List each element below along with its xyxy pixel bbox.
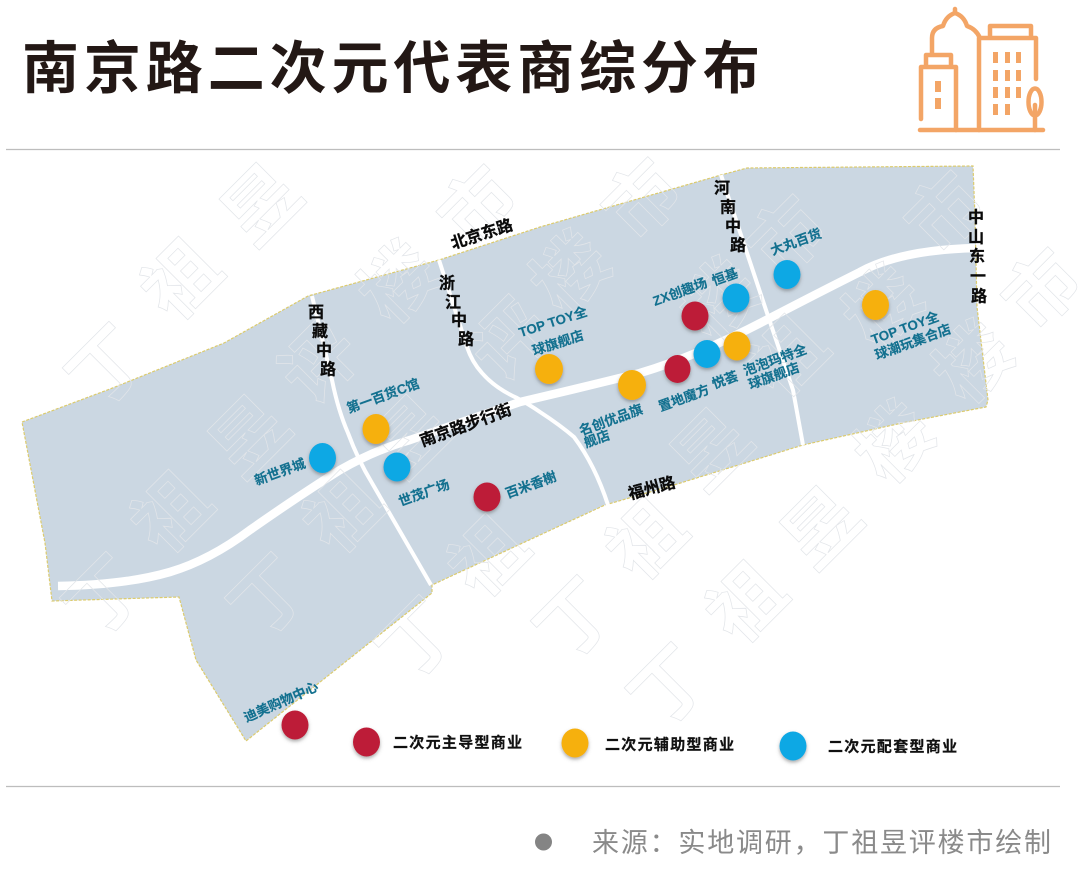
watermark: repeated outlined text bbox=[49, 144, 1080, 743]
legend: dominant: 二次元主导型商业 bbox=[393, 734, 523, 752]
label: TOP TOY全球旗舰店: TOP TOY全 bbox=[517, 303, 590, 340]
road label: 浙江中路: 路 bbox=[458, 330, 474, 348]
legend: supporting bbox=[780, 732, 958, 760]
watermark: repeated outlined text: 楼 bbox=[828, 251, 940, 363]
watermark: repeated outlined text: 祖 bbox=[116, 457, 228, 569]
road label: 中山东一路: 东 bbox=[969, 246, 985, 266]
label: TOP TOY全球潮玩集合店: 球潮玩集合店 bbox=[873, 320, 953, 363]
watermark: repeated outlined text: 昱 bbox=[356, 381, 468, 493]
road label: 中山东一路: 中 bbox=[968, 208, 984, 226]
markers: auxiliary type bbox=[362, 290, 889, 444]
road label: 河南中路: 中 bbox=[725, 218, 741, 236]
watermark: repeated outlined text: 评 bbox=[264, 307, 376, 419]
label: 泡泡玛特全球旗舰店: 泡泡玛特全 bbox=[741, 340, 809, 378]
label: 泡泡玛特全球旗舰店: 球旗舰店 bbox=[746, 359, 802, 392]
watermark: repeated outlined text: 昱 bbox=[206, 149, 318, 261]
legend: dominant bbox=[353, 728, 523, 756]
road label: 西藏中路: 中 bbox=[316, 342, 332, 360]
watermark: repeated outlined text: 丁 bbox=[214, 541, 326, 653]
road label: 北京东路: 北京东路 bbox=[448, 215, 515, 253]
road label: 西藏中路: 路 bbox=[320, 360, 336, 378]
legend: auxiliary: 二次元辅助型商业 bbox=[605, 736, 735, 754]
label: ZX创趣场: ZX创趣场 bbox=[650, 274, 709, 309]
watermark: repeated outlined text: 楼 bbox=[839, 387, 951, 499]
watermark: repeated outlined text: 丁 bbox=[49, 541, 161, 653]
legend: auxiliary bbox=[562, 728, 735, 758]
title: 南京路二次元代表商综分布 bbox=[22, 37, 765, 101]
watermark: repeated outlined text: 祖 bbox=[732, 301, 844, 413]
label: 百米香榭: 百米香榭 bbox=[503, 468, 559, 501]
watermark: repeated outlined text: 昱 bbox=[656, 394, 768, 506]
road label: 河南中路: 南 bbox=[720, 198, 736, 216]
watermark: repeated outlined text: 楼 bbox=[343, 227, 455, 339]
watermark: repeated outlined text: 市 bbox=[587, 144, 699, 256]
watermark: repeated outlined text: 祖 bbox=[691, 547, 803, 659]
watermark: repeated outlined text: 祖 bbox=[591, 484, 703, 596]
watermark: repeated outlined text: 丁 bbox=[520, 564, 632, 676]
label: 第一百货C馆: 第一百货C馆 bbox=[344, 375, 421, 416]
watermark: repeated outlined text: 楼 bbox=[664, 244, 776, 356]
watermark: repeated outlined text: 丁 bbox=[52, 311, 164, 423]
watermark: repeated outlined text: 祖 bbox=[126, 224, 238, 336]
watermark: repeated outlined text: 评 bbox=[454, 284, 566, 396]
watermark: repeated outlined text: 丁 bbox=[614, 631, 726, 743]
road label: 中山东一路 bbox=[968, 208, 987, 306]
label: 悦荟: 悦荟 bbox=[710, 367, 740, 392]
label: 名创优品旗舰店: 名创优品旗 bbox=[577, 401, 645, 438]
watermark: repeated outlined text: 市 bbox=[890, 157, 1002, 269]
road label: 西藏中路: 藏 bbox=[312, 322, 328, 340]
label: 新世界城: 新世界城 bbox=[252, 455, 308, 488]
icon: city buildings bbox=[920, 9, 1043, 130]
road label: 福州路: 福州路 bbox=[626, 473, 677, 503]
road label: 西藏中路: 西 bbox=[308, 304, 324, 322]
label: 恒基: 恒基 bbox=[710, 264, 740, 289]
watermark: repeated outlined text: 楼 bbox=[515, 217, 627, 329]
label: TOP TOY全球潮玩集合店: TOP TOY全 bbox=[869, 308, 942, 347]
label: 迪美购物中心: 迪美购物中心 bbox=[241, 678, 320, 725]
source note: 来源：实地调研，丁祖昱评楼市绘制 bbox=[592, 828, 1053, 858]
road label: 浙江中路: 浙 bbox=[439, 274, 455, 292]
watermark: repeated outlined text: 昱 bbox=[194, 381, 306, 493]
markers: dominant type bbox=[282, 302, 708, 740]
watermark: repeated outlined text: 楼 bbox=[918, 307, 1030, 419]
road label: 河南中路: 路 bbox=[730, 236, 746, 254]
road label: 河南中路: 河 bbox=[714, 180, 730, 198]
watermark: repeated outlined text: 市 bbox=[732, 181, 844, 293]
road label: 中山东一路: 山 bbox=[968, 228, 984, 246]
source bullet bbox=[535, 834, 552, 850]
watermark: repeated outlined text: 昱 bbox=[766, 472, 878, 584]
label: 大丸百货: 大丸百货 bbox=[768, 225, 824, 258]
road label: 河南中路 bbox=[714, 180, 746, 254]
label: 世茂广场: 世茂广场 bbox=[396, 476, 452, 509]
road label: 中山东一路: 路 bbox=[971, 286, 987, 306]
label: TOP TOY全球旗舰店 bbox=[517, 303, 590, 358]
watermark: repeated outlined text: 市 bbox=[423, 151, 535, 263]
watermark: repeated outlined text: 祖 bbox=[288, 457, 400, 569]
roads bbox=[58, 175, 975, 586]
watermark: repeated outlined text: 祖 bbox=[433, 501, 545, 613]
markers: supporting type bbox=[309, 260, 800, 482]
label: TOP TOY全球旗舰店: 球旗舰店 bbox=[530, 327, 586, 358]
road label: 南京路步行街: 南京路步行街 bbox=[417, 400, 514, 450]
map district area bbox=[22, 166, 988, 741]
road label: 中山东一路: 一 bbox=[970, 268, 986, 286]
road label: 浙江中路 bbox=[439, 274, 474, 348]
road label: 西藏中路 bbox=[308, 304, 336, 378]
label: 置地魔方: 置地魔方 bbox=[656, 381, 712, 414]
road label: 浙江中路: 江 bbox=[445, 294, 461, 312]
road label: 浙江中路: 中 bbox=[451, 312, 467, 330]
label: 名创优品旗舰店: 舰店 bbox=[582, 426, 612, 451]
legend: supporting: 二次元配套型商业 bbox=[828, 738, 958, 756]
watermark: repeated outlined text: 丁 bbox=[362, 584, 474, 696]
